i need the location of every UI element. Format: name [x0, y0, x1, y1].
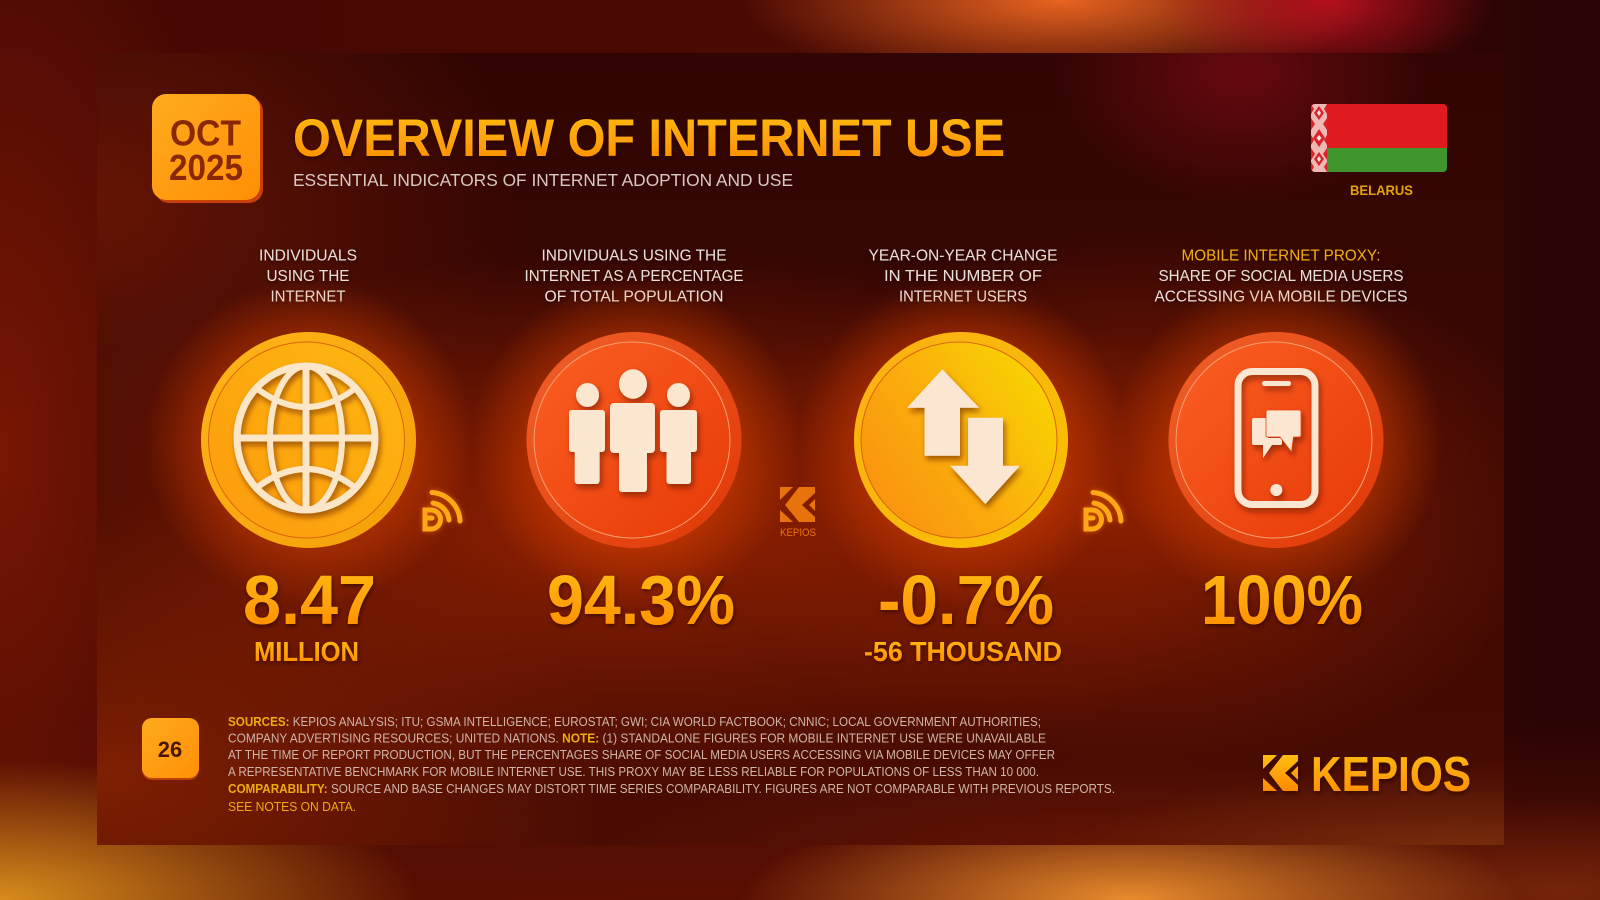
flag label: BELARUS	[1350, 182, 1413, 198]
column 1 heading: INTERNET	[270, 288, 346, 306]
page number badge: 26	[158, 737, 182, 762]
title: OVERVIEW OF INTERNET USE	[293, 109, 1005, 168]
page number badge	[142, 718, 199, 780]
footnotes: COMPANY ADVERTISING RESOURCES; UNITED NATIONS. NOTE: (1) STANDALONE FIGURES FOR MOBILE INTERNET USE WERE UNAVAILABLE	[228, 730, 1046, 746]
flag: Belarus	[1311, 104, 1447, 172]
column 2 heading: OF TOTAL POPULATION	[544, 288, 724, 306]
value: 8.47 million: 8.47	[243, 561, 376, 639]
data source icon 2	[1086, 492, 1121, 529]
column 3 heading: INTERNET USERS	[899, 288, 1027, 306]
column 2 heading: INDIVIDUALS USING THE	[542, 248, 726, 264]
small Kepios logo: KEPIOS	[780, 527, 816, 539]
column 1 heading: INDIVIDUALS	[259, 248, 357, 264]
footnotes: AT THE TIME OF REPORT PRODUCTION, BUT THE PERCENTAGES SHARE OF SOCIAL MEDIA USERS ACCESSING VIA MOBILE DEVICES MAY OFFER	[228, 747, 1055, 762]
value: -0.7% and -56 thousand: -0.7%	[878, 561, 1054, 639]
Kepios logo	[1263, 748, 1471, 802]
column 4 heading: MOBILE INTERNET PROXY:	[1182, 248, 1380, 264]
value: 94.3%: 94.3%	[547, 561, 735, 639]
column 4 heading: ACCESSING VIA MOBILE DEVICES	[1154, 288, 1408, 306]
subtitle: ESSENTIAL INDICATORS OF INTERNET ADOPTION AND USE	[293, 170, 793, 190]
coin icon: phone with chat bubbles	[1113, 278, 1443, 608]
coin icon: people	[471, 278, 801, 608]
column 2 heading: INTERNET AS A PERCENTAGE	[524, 268, 744, 285]
coin icon: up and down arrows	[798, 278, 1128, 608]
coin icon: globe	[145, 278, 475, 608]
column 3 heading: YEAR-ON-YEAR CHANGE	[868, 248, 1058, 264]
footnotes	[228, 714, 1115, 814]
data source icon 1	[425, 492, 460, 529]
value: -0.7% and -56 thousand: -56 THOUSAND	[864, 636, 1062, 667]
footnotes: SEE NOTES ON DATA.	[228, 799, 356, 814]
main panel background	[97, 53, 1504, 845]
column 3 heading	[868, 248, 1058, 306]
footnotes: A REPRESENTATIVE BENCHMARK FOR MOBILE INTERNET USE. THIS PROXY MAY BE LESS RELIABLE FOR POPULATIONS OF LESS THAN 10 000.	[228, 764, 1039, 779]
footnotes: SOURCES: KEPIOS ANALYSIS; ITU; GSMA INTELLIGENCE; EUROSTAT; GWI; CIA WORLD FACTBOOK; CNNIC; LOCAL GOVERNMENT AUTHORITIES;	[228, 714, 1041, 729]
column 1 heading: USING THE	[266, 268, 350, 285]
value: 8.47 million: MILLION	[254, 636, 359, 667]
date badge: OCT	[170, 112, 241, 154]
column 1 heading	[259, 248, 357, 306]
column 4 heading	[1154, 248, 1408, 306]
column 4 heading: SHARE OF SOCIAL MEDIA USERS	[1158, 268, 1404, 285]
footnotes: COMPARABILITY: SOURCE AND BASE CHANGES MAY DISTORT TIME SERIES COMPARABILITY. FIGURES ARE NOT COMPARABLE WITH PREVIOUS REPORTS.	[228, 781, 1115, 796]
date badge: 2025	[169, 147, 243, 188]
value: -0.7% and -56 thousand	[864, 561, 1062, 667]
Kepios logo: KEPIOS	[1311, 748, 1471, 802]
column 3 heading: IN THE NUMBER OF	[884, 268, 1042, 285]
small Kepios logo	[780, 487, 816, 539]
date badge	[152, 94, 263, 203]
column 2 heading	[524, 248, 744, 306]
value: 100%: 100%	[1201, 561, 1363, 639]
